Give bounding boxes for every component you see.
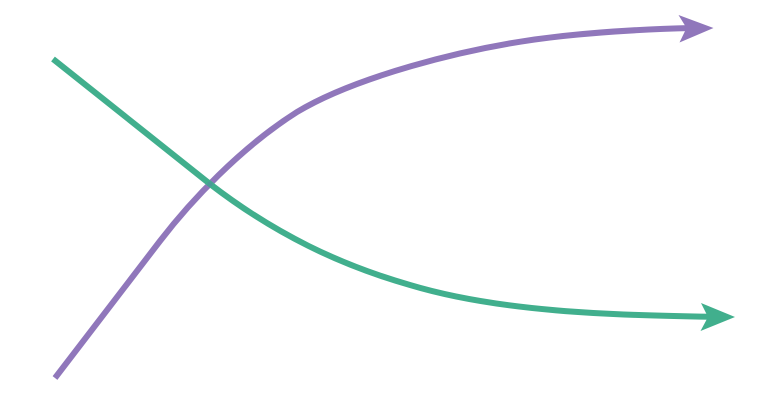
- arrow: green falling curve: [53, 59, 735, 331]
- arrow: purple rising curve: [55, 15, 714, 378]
